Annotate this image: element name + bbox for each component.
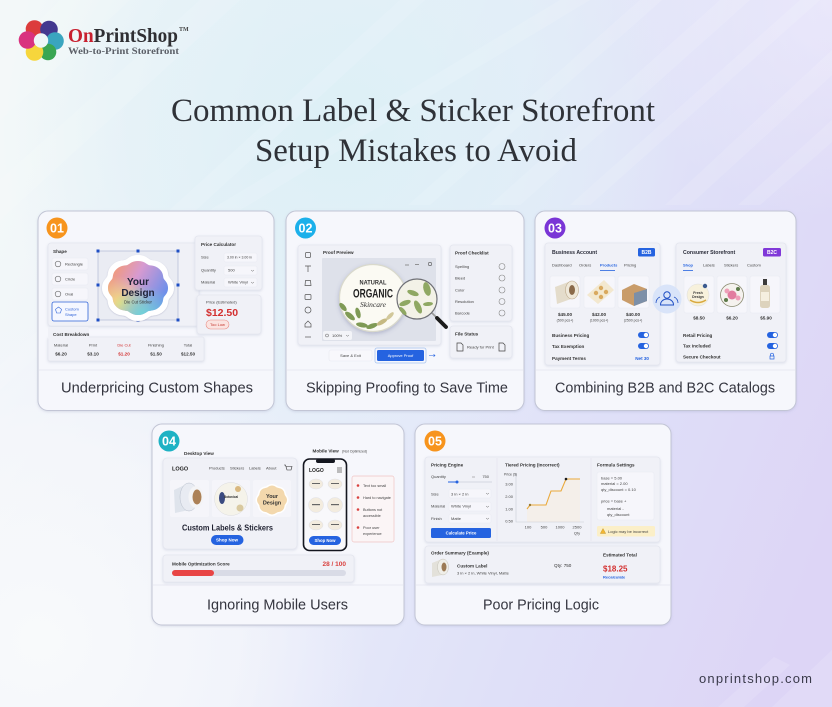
panel: 03 Combining B2B and B2C Catalogs <box>535 211 796 410</box>
tiered pricing line chart: Tiered Pricing (Incorrect) <box>505 462 560 468</box>
tiered pricing line chart: 1.00 <box>505 506 514 512</box>
shape editor: Shape <box>65 312 77 317</box>
panel: 04 Ignoring Mobile Users <box>152 424 404 625</box>
proof checklist: Proof Checklist <box>455 250 489 256</box>
shape editor <box>48 243 199 326</box>
order summary: Estimated Total <box>603 552 637 558</box>
order summary: Custom Label <box>457 564 487 568</box>
order summary: Recalculate <box>603 574 626 580</box>
price calculator: 3.00 in × 3.00 in <box>227 256 252 260</box>
tiered pricing line chart: Price ($) <box>504 472 517 476</box>
cost breakdown: Total <box>184 342 192 348</box>
icon: floral sticker <box>720 284 744 306</box>
proof checklist: Resolution <box>455 299 474 304</box>
proof checklist <box>450 245 512 321</box>
icon: round sticker <box>687 284 709 306</box>
phone mockup: Shop Now <box>314 538 336 543</box>
icon: round sticker: Botanical <box>224 495 238 499</box>
shape editor: Shape <box>53 249 67 254</box>
formula settings: qty_discount <box>607 512 630 517</box>
formula settings: material - <box>607 506 624 511</box>
desktop mockup: Products <box>209 466 225 470</box>
tiered pricing line chart <box>504 462 584 536</box>
phone mockup: LOGO <box>309 468 324 474</box>
icon: bottle <box>760 279 770 308</box>
price calculator: Material <box>201 280 215 284</box>
cost breakdown: $3.10 <box>87 352 99 356</box>
phone mockup <box>304 459 346 550</box>
consumer storefront: B2C <box>767 250 777 256</box>
consumer storefront: Retail Pricing <box>683 333 713 338</box>
desktop mockup: Labels <box>249 466 261 470</box>
icon: blob sticker <box>256 485 288 515</box>
proof checklist: Spelling <box>455 264 469 269</box>
badge 03: 03 <box>548 222 562 236</box>
title <box>171 93 655 169</box>
icon: box <box>622 284 647 306</box>
cost breakdown: Cost Breakdown <box>53 332 89 337</box>
title: Setup Mistakes to Avoid <box>255 133 577 169</box>
panel: 01 Underpricing Custom Shapes <box>38 211 274 410</box>
cost breakdown: Die Cut <box>117 342 132 348</box>
issues callout: accessible <box>363 514 381 518</box>
tiered pricing line chart: 100 <box>525 524 532 530</box>
cost breakdown: Print <box>89 342 98 348</box>
issues callout: Hard to navigate <box>363 496 391 500</box>
cost breakdown: $6.20 <box>55 352 67 356</box>
cost breakdown: Material <box>54 342 68 348</box>
pricing engine <box>431 462 492 538</box>
business account: B2B <box>641 250 652 256</box>
website url: onprintshop.com <box>699 671 812 686</box>
pricing engine: Finish <box>431 516 442 521</box>
mobile view heading: (Not Optimized) <box>342 450 367 454</box>
order summary: $18.25 <box>603 564 628 574</box>
tagline: Web-to-Print Storefront <box>68 47 180 57</box>
tiered pricing line chart: 2500 <box>573 524 582 530</box>
formula settings: Formula Settings <box>597 462 635 468</box>
badge 04: 04 <box>162 434 176 448</box>
organic skincare label <box>338 264 406 332</box>
price calculator: 500 <box>228 268 235 272</box>
tiered pricing line chart: 2.00 <box>505 494 514 499</box>
pricing dashboard <box>425 457 660 542</box>
die-cut sticker: Your <box>127 277 149 288</box>
badge 05 <box>424 430 446 452</box>
formula settings: material = 2.00 <box>601 481 628 486</box>
business account: (2500 pcs+) <box>624 318 642 322</box>
caption: Poor Pricing Logic <box>483 596 599 614</box>
mobile view heading: Mobile View <box>312 448 339 454</box>
price calculator: Quantity <box>201 268 216 272</box>
business account: Payment Terms <box>552 356 586 361</box>
shape editor: Circle <box>65 276 76 282</box>
cost breakdown: Finishing <box>148 342 164 348</box>
issues callout <box>352 476 394 542</box>
proof preview: 100% <box>332 333 343 338</box>
warning <box>597 526 655 536</box>
badge 04 <box>158 430 180 452</box>
panel: 02 Skipping Proofing to Save Time <box>286 211 524 410</box>
business account: Products <box>600 262 618 268</box>
shape editor: Custom <box>65 306 79 312</box>
organic skincare label: NATURAL <box>360 280 387 286</box>
badge 02: 02 <box>299 222 312 236</box>
proof checklist: Barcode <box>455 310 471 316</box>
cost breakdown: $1.50 <box>150 352 162 356</box>
icon: label roll <box>432 559 448 577</box>
estimated price: $12.50 <box>206 307 238 319</box>
caption: Skipping Proofing to Save Time <box>306 380 508 396</box>
shape editor: Rectangle <box>65 262 84 266</box>
issues callout: Text too small <box>363 484 386 488</box>
business account: Pricing <box>624 262 636 268</box>
business account: $40.00 <box>626 312 640 317</box>
pricing engine: White Vinyl <box>451 504 471 508</box>
price calculator <box>195 236 262 290</box>
tiered pricing line chart: Qty <box>574 530 580 536</box>
business account: Tax Exemption <box>552 344 585 349</box>
business account: (500 pcs+) <box>557 318 573 322</box>
proof preview <box>298 245 441 345</box>
consumer storefront: Stickers <box>724 262 738 268</box>
formula settings: qty_discount = 0.10 <box>601 487 637 492</box>
consumer storefront: Consumer Storefront <box>683 250 735 256</box>
consumer storefront: Tax Included <box>683 344 711 348</box>
formula settings: price = base + <box>601 498 627 504</box>
pricing engine: 750 <box>482 474 490 479</box>
icon: label roll <box>174 483 204 513</box>
consumer storefront: $6.20 <box>726 316 738 320</box>
estimated price <box>197 295 261 334</box>
warning: Logic may be incorrect <box>608 529 649 534</box>
pricing engine: Matte <box>451 516 462 521</box>
wordmark: OnPrintShop <box>68 25 178 47</box>
buttons: Save & Exit <box>340 353 362 358</box>
pricing engine: Size <box>431 492 440 496</box>
title: Common Label & Sticker Storefront <box>171 93 655 129</box>
die-cut sticker: Design <box>121 288 155 299</box>
pricing engine: Quantity <box>431 474 446 479</box>
business account: $42.00 <box>592 312 606 317</box>
mobile view heading <box>312 448 367 454</box>
icon: blob sticker: Your <box>266 494 279 500</box>
issues callout: Poor user <box>363 526 380 530</box>
consumer storefront: $8.50 <box>693 316 705 320</box>
mobile optimization score: Mobile Optimization Score <box>172 562 230 566</box>
business account: Business Pricing <box>552 333 589 338</box>
business account: Net 30 <box>635 356 649 361</box>
business account: (1000 pcs+) <box>590 318 608 322</box>
buttons: Approve Proof <box>388 353 414 358</box>
consumer storefront: Secure Checkout <box>683 354 721 360</box>
desktop mockup: LOGO <box>172 466 189 472</box>
shape editor: Oval <box>65 292 73 296</box>
badge 05: 05 <box>428 434 442 448</box>
caption: Ignoring Mobile Users <box>207 596 348 614</box>
issues callout: experience <box>363 532 382 536</box>
icon: round sticker: Design <box>692 295 704 299</box>
tiered pricing line chart: 1000 <box>556 524 565 530</box>
business account <box>545 243 660 365</box>
icon: label roll <box>555 281 578 304</box>
order summary <box>425 546 660 583</box>
file status <box>450 326 512 358</box>
desktop view heading: Desktop View <box>184 451 214 456</box>
badge 01 <box>46 218 68 238</box>
price calculator: Size <box>201 254 210 260</box>
badge 01: 01 <box>50 222 64 236</box>
consumer storefront: $5.90 <box>760 316 772 320</box>
icon: blob sticker: Design <box>263 500 282 506</box>
icon: sticker sheet <box>587 280 614 304</box>
consumer storefront <box>676 243 786 362</box>
pricing engine: Pricing Engine <box>431 462 464 468</box>
consumer storefront: Shop <box>683 262 694 268</box>
price calculator: Price Calculator <box>201 242 236 247</box>
formula settings <box>597 462 654 520</box>
icon: colour petals <box>19 20 64 61</box>
price calculator: White Vinyl <box>228 280 248 284</box>
caption: Underpricing Custom Shapes <box>61 380 253 396</box>
cost breakdown: $1.20 <box>118 352 130 356</box>
organic skincare label: Skincare <box>360 300 387 309</box>
die-cut sticker: Die Cut Sticker <box>124 300 153 304</box>
issues callout: Buttons not <box>363 508 383 512</box>
desktop mockup: Custom Labels & Stickers <box>182 524 274 532</box>
badge 03 <box>544 218 566 238</box>
consumer storefront: Labels <box>703 262 715 268</box>
mobile optimization score: 28 / 100 <box>322 561 346 568</box>
pricing engine: Material <box>431 504 445 508</box>
desktop mockup <box>163 458 297 549</box>
business account: Business Account <box>552 250 597 256</box>
estimated price: Price (Estimated) <box>206 300 237 304</box>
order summary: 3 in × 2 in, White Vinyl, Matte <box>457 570 510 576</box>
desktop mockup: Stickers <box>230 466 244 470</box>
tiered pricing line chart: 500 <box>541 524 548 530</box>
order summary: Qty: 750 <box>554 563 572 568</box>
icon: round sticker: Fresh <box>693 291 703 295</box>
formula settings: base = 5.00 <box>601 476 623 480</box>
logo: OnPrintShop <box>19 20 189 61</box>
trademark: TM <box>179 27 189 33</box>
cost breakdown <box>48 327 204 361</box>
desktop mockup: About <box>266 466 277 470</box>
estimated price: Too Low <box>210 322 225 327</box>
pricing engine: Calculate Price <box>446 530 477 536</box>
mobile optimization score <box>163 555 354 582</box>
file status: Ready for Print <box>467 344 495 350</box>
panel: 05 Poor Pricing Logic <box>415 424 671 625</box>
organic skincare label: ORGANIC <box>353 286 393 300</box>
tiered pricing line chart: 0.50 <box>505 518 514 524</box>
order summary: Order Summary (Example) <box>431 550 489 556</box>
proof checklist: Bleed <box>455 276 465 280</box>
business account: Orders <box>579 262 591 268</box>
proof checklist: Color <box>455 288 465 292</box>
consumer storefront: Custom <box>747 262 761 268</box>
file status: File Status <box>455 332 479 336</box>
magnifier <box>397 279 446 327</box>
business account: Dashboard <box>552 262 572 268</box>
tiered pricing line chart: 3.00 <box>505 482 514 486</box>
icon: users connector <box>652 284 682 314</box>
badge 02 <box>295 218 316 238</box>
buttons <box>329 348 435 363</box>
caption: Combining B2B and B2C Catalogs <box>555 380 775 396</box>
proof preview: Proof Preview <box>323 250 354 255</box>
die-cut sticker <box>102 255 174 321</box>
pricing engine: 3 in × 2 in <box>451 492 468 496</box>
desktop mockup: Shop Now <box>216 538 238 543</box>
business account: $45.00 <box>558 312 572 317</box>
cost breakdown: $12.50 <box>181 352 195 356</box>
